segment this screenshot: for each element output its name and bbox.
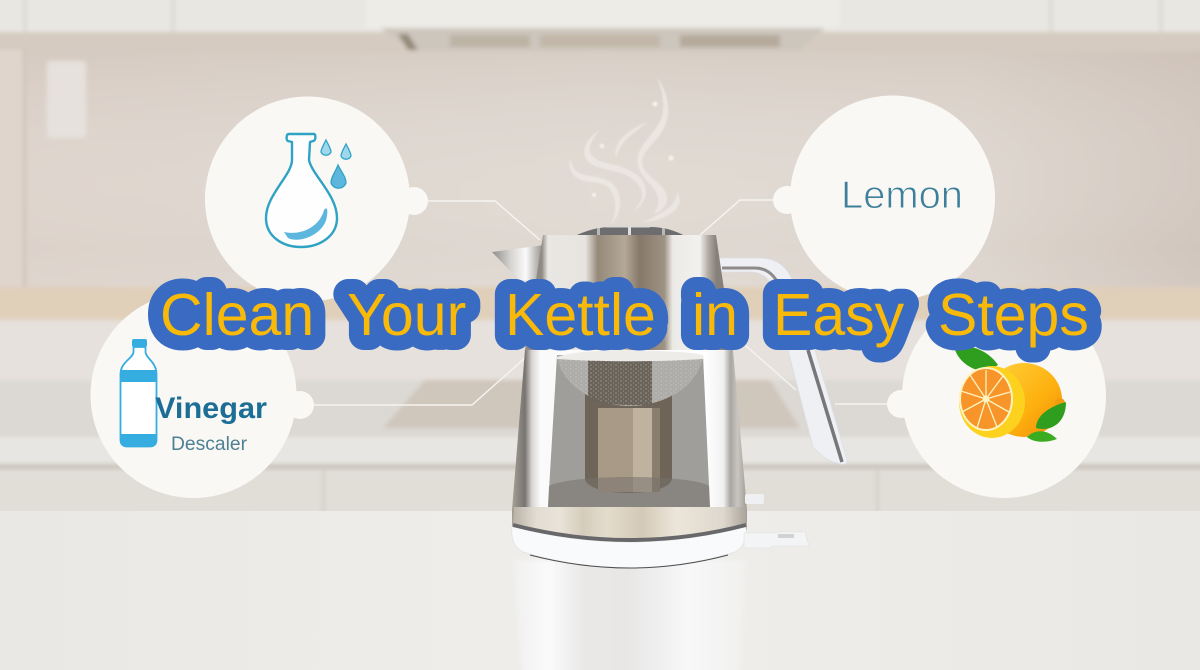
descaler label: Descaler bbox=[171, 434, 248, 455]
title: in bbox=[692, 282, 738, 348]
water surface foam bbox=[557, 349, 703, 361]
icon: citrus fruit bbox=[955, 347, 1066, 442]
title: Kettle bbox=[505, 282, 656, 348]
title: Clean bbox=[160, 282, 314, 348]
inner cylinder bbox=[585, 355, 672, 493]
kettle reflection bbox=[514, 560, 746, 670]
title: Your bbox=[347, 282, 466, 348]
panel: lemon text circle bbox=[773, 96, 995, 300]
title bbox=[160, 282, 1089, 348]
base underline bbox=[530, 555, 728, 568]
lower band bbox=[513, 507, 747, 541]
icon: flask with droplets bbox=[266, 134, 351, 247]
title: Easy bbox=[773, 282, 905, 348]
panel: flask circle bbox=[205, 96, 428, 302]
base rim bbox=[513, 525, 746, 540]
vinegar label: Vinegar bbox=[155, 392, 267, 425]
lemon label: Lemon bbox=[841, 174, 963, 217]
panel: vinegar circle bbox=[90, 292, 314, 498]
kettle handle bbox=[716, 258, 847, 464]
kettle upper body bbox=[525, 235, 733, 350]
counter top bbox=[0, 511, 1200, 670]
icon: vinegar bottle bbox=[120, 339, 157, 447]
kettle base bbox=[512, 526, 746, 568]
bubble dome bbox=[557, 355, 703, 406]
kettle lower body bbox=[512, 350, 747, 530]
title: Steps bbox=[938, 282, 1089, 348]
lower water pool bbox=[548, 477, 710, 507]
panel: citrus circle bbox=[887, 294, 1106, 498]
water window bbox=[548, 355, 710, 507]
kettle bbox=[492, 225, 847, 568]
kettle lid bbox=[575, 225, 685, 236]
kettle spout bbox=[492, 245, 544, 282]
cylinder inner section bbox=[598, 408, 660, 492]
connector lines bbox=[314, 200, 887, 405]
steam bbox=[570, 77, 680, 224]
power cord plug bbox=[744, 494, 809, 548]
